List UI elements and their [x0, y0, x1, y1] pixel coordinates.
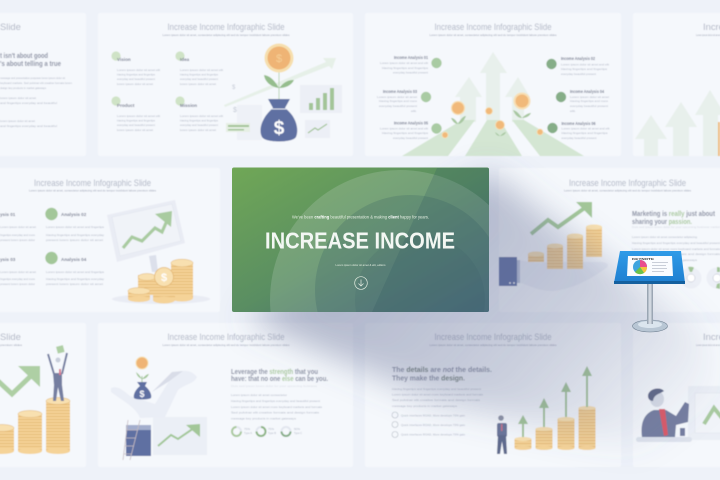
panel: partial coin stacks slide bottom left: [0, 323, 86, 467]
item: idea: everyday and beautiful present: [180, 77, 218, 81]
item: analysis 03: [0, 257, 36, 286]
item: income analysis 04: elit.: [570, 109, 576, 113]
quote fragment line two: 's about telling a true: [0, 59, 61, 68]
chart: three donuts: [232, 427, 302, 436]
chart: donut stats: [680, 267, 720, 289]
illustration: hands, bag, ladder and chart: [111, 357, 207, 460]
body copy: Having fingertips and fingertips everyday and beautiful present: [632, 241, 720, 245]
item: income analysis 03: Having fingertips and more: [379, 99, 417, 103]
illustration: money bag growing coin: $: [233, 107, 237, 114]
quote: Marketing is really just about: [632, 209, 716, 218]
item: income analysis 03: elit.: [411, 109, 417, 113]
item: product: everyday and beautiful present: [117, 123, 155, 127]
subheading: Lorem ipsum dolor sit amet, consectetur adipiscing elit sed do tempor incididunt labore premium slides: [162, 343, 290, 347]
illustration: money bag growing coin: $: [274, 118, 285, 139]
heading: Increase Income Infographic Slide: [434, 331, 552, 342]
chart: three donuts: Type C: [294, 431, 302, 435]
chart: rising arrows: [635, 90, 720, 156]
item: analysis 03: Lorem ipsum dolor sit amet: [0, 270, 36, 274]
item: income analysis 01: Income Analysis 01: [394, 55, 428, 60]
item: product: [111, 96, 160, 132]
item: analysis 04: present lorem ipsum dolor sit amet: [46, 282, 103, 286]
item: analysis 04: Analysis 04: [61, 257, 87, 262]
item: analysis 02: [45, 208, 105, 242]
chart: three donuts: 75%: [244, 427, 251, 431]
item: income analysis 04: Lorem ipsum dolor sit amet: [570, 95, 609, 99]
quote: The details are not the details.: [392, 365, 492, 374]
item: income analysis 04: everyday beautiful present: [570, 104, 608, 108]
heading fragment: Slide: [0, 331, 21, 342]
illustration: presenter with chart board: [636, 386, 720, 442]
body copy: [392, 387, 484, 408]
item: mission: lorem ipsum dolor sit amet: [180, 128, 216, 132]
item: income analysis 02: everyday beautiful present: [561, 72, 596, 76]
subheading: Lorem ipsum dolor sit amet, consectetur adipiscing elit sed do tempor incididunt labore premium slides: [430, 343, 557, 347]
item: income analysis 05: Lorem ipsum dolor sit amet and elit: [380, 126, 428, 130]
item: analysis 01: [0, 212, 36, 242]
item: idea: Having fingertips and fingertips: [180, 72, 219, 76]
item: income analysis 06: [547, 121, 610, 140]
item: vision: Having fingertips and fingertips: [117, 72, 156, 76]
body copy: Sed pulvinar elit creative formats and design formats: [632, 252, 720, 256]
subheading fragment: premium slides: [0, 343, 23, 347]
item: product: Product: [117, 103, 135, 108]
quote fragment: t isn't about good: [0, 51, 48, 60]
item: income analysis 03: everyday beautiful present: [379, 104, 417, 108]
item: analysis 03: ysis 03: [0, 257, 16, 262]
item: income analysis 02: Having fingertips and fingertips: [561, 67, 608, 71]
item: vision: everyday and beautiful present: [117, 77, 155, 81]
item: analysis 01: fingertips everyday and more: [0, 233, 35, 237]
body copy: Lorem ipsum dolor sit amet consectetur: [231, 393, 287, 397]
item: income analysis 01: Lorem ipsum dolor sit amet and elit: [380, 61, 428, 65]
illustration: coin stacks: $: [161, 272, 167, 284]
item: mission: Lorem ipsum dolor sit amet elit: [180, 114, 223, 118]
item: idea: [175, 51, 223, 86]
body copy: message key products in market gateways: [231, 416, 297, 420]
panel: vision idea product mission slide: [98, 13, 353, 156]
chart: three donuts: 50%: [294, 427, 301, 431]
item: idea: lorem ipsum dolor sit amet: [180, 82, 216, 86]
body copy: and fingertips everyday and beautiful: [0, 101, 57, 105]
item: analysis 03: fingertips everyday and more: [0, 277, 35, 281]
item: income analysis 02: [546, 56, 609, 76]
body copy: [231, 384, 323, 420]
chart: three rising arrows: [402, 52, 584, 156]
panel: marketing hand slide middle right: [499, 168, 720, 312]
item: analysis 04: [45, 252, 105, 286]
item: vision: Vision: [117, 57, 131, 62]
illustration: signboard with rising arrow: [107, 200, 185, 272]
illustration: coin stacks: [0, 398, 70, 454]
illustration: hands, bag, ladder and chart: $: [139, 389, 145, 399]
illustration: man looking up: [497, 415, 507, 454]
illustration: money bag growing coin: $: [232, 85, 236, 91]
item: vision: Lorem ipsum dolor sit amet elit: [117, 68, 160, 72]
subheading: Lorem ipsum dolor sit amet, consectetur adipiscing elit sed do tempor incididunt labore premium slides: [29, 188, 157, 192]
chart: rising arrow: [0, 366, 40, 394]
item: income analysis 04: Income Analysis 04: [570, 89, 604, 94]
illustration: businessman celebrating: [48, 345, 67, 401]
body copy: lorem ipsum dolor sit amet: [0, 96, 36, 100]
icons: coin plants: [442, 94, 543, 138]
item: product: Having fingertips and fingertips: [117, 118, 156, 122]
heading fragment: Slide: [0, 21, 21, 32]
item: analysis 02: Analysis 02: [61, 212, 87, 217]
item: idea: Idea: [180, 57, 190, 62]
body copy: Lorem ipsum dolor sit amet more keyboard markets and formats: [392, 392, 484, 396]
item: income analysis 06: Lorem ipsum dolor sit amet and elit: [562, 126, 610, 130]
subheading: Lorem ipsum dolor sit amet, consectetur adipiscing elit sed do tempor incididunt labore premium slides: [430, 33, 557, 37]
item: analysis 04: Lorem ipsum dolor sit amet and fingertips: [46, 270, 105, 274]
body copy: message and presentation purposes lorem ipsum dolor sit: [0, 76, 65, 80]
heading: Increase Income Infographic Slide: [168, 21, 284, 32]
chart: three donuts: Type A: [244, 431, 252, 435]
body copy: Having fingertips and fingertips everyday and beautiful present: [231, 399, 320, 403]
body copy: Lorem ipsum dolor sit amet more keyboard markets and formats: [632, 247, 720, 251]
small caption: Lorem ipsum dolor sit amet & elit, editors: [336, 263, 386, 267]
main title: INCREASE INCOME: [265, 228, 455, 254]
item: income analysis 06: Income Analysis 06: [562, 121, 596, 126]
keynote slide thumbnail: KEYNOTE: [632, 257, 654, 261]
subheading: Lorem ipsum dolor sit amet, consectetur adipiscing elit sed do tempor incididunt labore premium slides: [162, 33, 290, 37]
heading: Increase Income Infographic Slide: [569, 177, 686, 188]
body copy: Duis sed ipsum lorem dolor for your upcoming business market: [632, 225, 720, 229]
item: income analysis 04: Having fingertips and more: [570, 99, 608, 103]
body copy: Lorem ipsum dolor sit amet consectetur adipiscing: [632, 235, 697, 239]
icon: keynote podium: [614, 251, 685, 332]
quote line two: sharing your passion.: [632, 217, 692, 226]
body copy: Duis sed ipsum lorem dolor for your upcoming business: [231, 384, 318, 388]
item: analysis 01: present lorem ipsum dolor: [0, 238, 35, 242]
panel: income analysis arrows slide: [365, 13, 621, 156]
item: idea: Lorem ipsum dolor sit amet elit: [180, 68, 223, 72]
panel: partial story slide top left: [0, 13, 86, 156]
item: analysis 02: present lorem ipsum dolor sit amet: [46, 238, 103, 242]
icon: down arrow in circle: [355, 277, 367, 289]
item: vision: [111, 51, 160, 86]
body copy: Sed pulvinar elit creative formats and design formats: [392, 398, 481, 402]
quote line two: have: that no one else can be you.: [231, 374, 328, 383]
panel: analysis sign slide middle left: [0, 168, 220, 312]
quote: Leverage the strength that you: [231, 367, 318, 376]
item: income analysis 05: [380, 120, 442, 140]
item: analysis 01: ysis 01: [0, 212, 16, 217]
checklist: Quick interfaces ROAD, More develops 70% gain: [401, 423, 465, 427]
item: product: lorem ipsum dolor sit amet: [117, 128, 153, 132]
body copy: design key products in market gateways: [0, 86, 47, 90]
item: income analysis 03: Income Analysis 03: [383, 89, 417, 94]
decorative rings: [270, 168, 489, 312]
item: income analysis 06: Having fingertips and fingertips: [562, 131, 608, 135]
heading: Increase Income Infographic Slide: [168, 331, 284, 342]
body copy: Having fingertips and fingertips everyday and beautiful present: [392, 387, 481, 391]
item: mission: everyday and beautiful present: [180, 123, 218, 127]
quote line two: They make the design.: [392, 374, 465, 382]
item: income analysis 01: Having fingertips and fingertips: [382, 66, 429, 70]
checklist: Quick interfaces ROAD, More develops 70% gain: [401, 414, 465, 418]
body copy: keyboard markets. Sed pulvinar elit creative formats lorem: [0, 81, 73, 85]
chart: three donuts: 75%: [268, 427, 275, 431]
item: mission: Mission: [180, 103, 197, 108]
item: product: Lorem ipsum dolor sit amet elit: [117, 114, 160, 118]
item: income analysis 05: everyday beautiful present: [393, 136, 428, 140]
item: income analysis 05: Having fingertips and fingertips: [382, 131, 429, 135]
panel: partial arrows slide top right: [633, 13, 720, 156]
body copy: Lorem ipsum dolor sit amet more keyboard markets and formats: [231, 405, 323, 409]
illustration: coin stacks: [112, 259, 210, 304]
body copy: Sed pulvinar elit creative formats and design formats: [231, 410, 320, 414]
item: income analysis 03: Lorem ipsum dolor sit amet: [377, 95, 417, 99]
item: vision: lorem ipsum dolor sit amet: [117, 82, 153, 86]
item: income analysis 01: [380, 55, 442, 74]
body copy: and fingertips everyday and beautiful: [0, 124, 57, 128]
panel: partial presenter slide bottom right: [633, 323, 720, 467]
chart: growing coin stacks with arrows: [514, 366, 596, 450]
checklist: [392, 412, 465, 438]
body copy: message key products in market gateways: [632, 258, 698, 262]
heading: Increase Income Infographic Slide: [34, 177, 151, 188]
chart: three donuts: Type B: [268, 431, 276, 435]
item: income analysis 04: [556, 89, 609, 113]
body copy: [632, 225, 720, 262]
panel: leverage strength slide: [98, 323, 353, 467]
body copy: message key products in market gateways: [392, 404, 458, 408]
tagline: We've been crafting beautiful presentation & making client happy for years.: [292, 214, 429, 220]
illustration: hand holding coin stacks: [499, 202, 608, 291]
item: mission: Having fingertips and fingertips: [180, 118, 219, 122]
item: analysis 02: Lorem ipsum dolor sit amet and fingertips: [46, 225, 105, 229]
item: income analysis 02: Income Analysis 02: [561, 56, 595, 61]
illustration: money bag growing coin: [224, 44, 342, 142]
checklist: Quick interfaces ROAD, More develops 70% gain: [401, 432, 465, 436]
item: mission: [175, 96, 223, 132]
item: analysis 03: present lorem ipsum dolor: [0, 282, 35, 286]
item: income analysis 01: everyday beautiful present: [393, 70, 428, 74]
body copy: lorem ipsum dolor sit amet: [0, 119, 35, 123]
item: analysis 01: Lorem ipsum dolor sit amet: [0, 225, 36, 229]
item: analysis 02: Having fingertips and fingertips everyday: [46, 233, 105, 237]
item: income analysis 03: [377, 89, 431, 113]
item: analysis 04: Having fingertips and fingertips everyday: [46, 277, 105, 281]
item: income analysis 02: Lorem ipsum dolor sit amet and elit: [561, 62, 609, 66]
subheading: Lorem ipsum dolor sit amet, consectetur adipiscing elit sed do tempor incididunt labore premium slides: [564, 188, 692, 192]
illustration: money bag growing coin: $: [276, 53, 282, 65]
long diagonal shadow: [245, 172, 720, 450]
item: income analysis 06: everyday beautiful present: [562, 136, 597, 140]
body copy: [0, 76, 73, 128]
panel: details design slide: [365, 323, 621, 467]
panel: main title slide: [232, 168, 489, 312]
heading: Increase Income Infographic Slide: [434, 21, 552, 32]
item: income analysis 05: Income Analysis 05: [394, 120, 428, 126]
